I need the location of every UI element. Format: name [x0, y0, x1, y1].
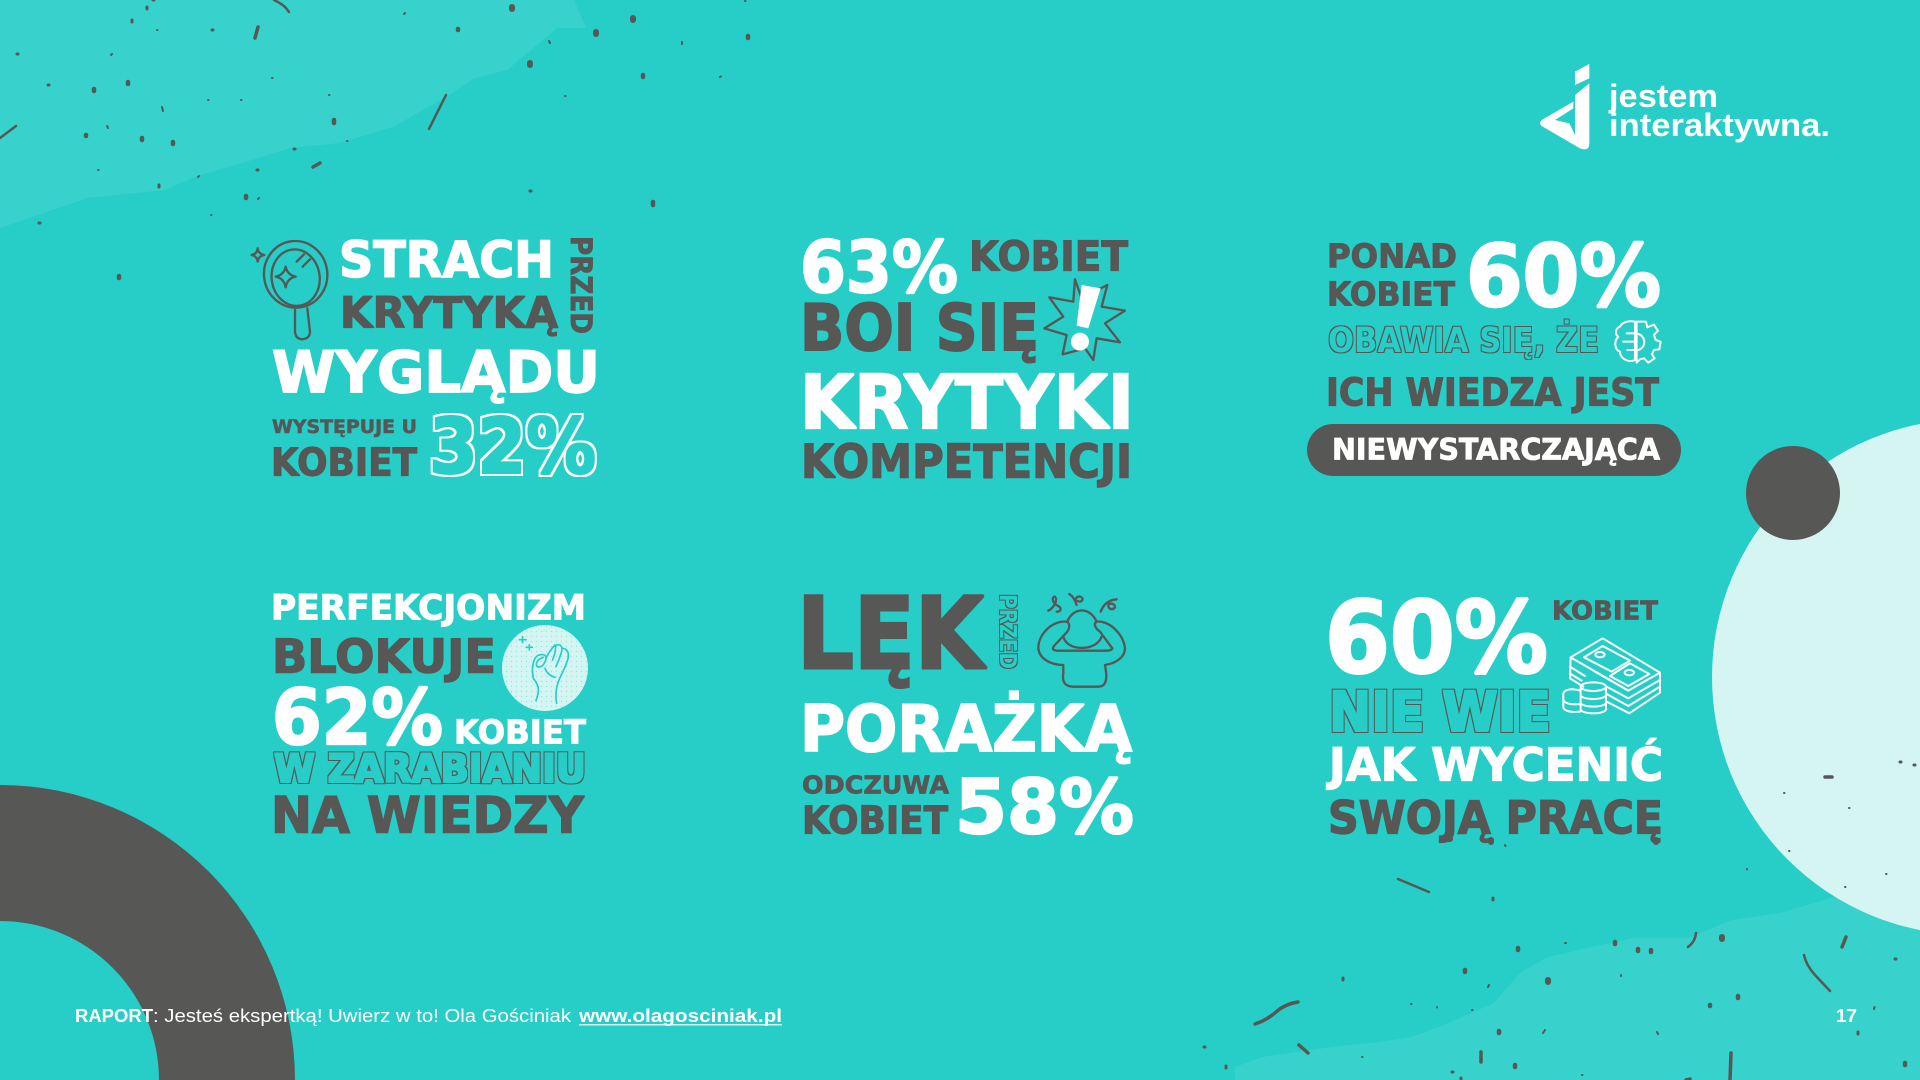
text: kobiet: KOBIET: [271, 440, 418, 486]
heading: porażką: PORAŻKĄ: [800, 691, 1132, 767]
heading: krytyką: KRYTYKĄ: [340, 288, 559, 338]
number: 60%: 60%: [1466, 227, 1661, 327]
icon: brain and gear: [1615, 321, 1661, 363]
rotated: przed: PRZED: [564, 236, 598, 334]
heading: blokuje: BLOKUJE: [272, 630, 496, 684]
logo icon: [1540, 64, 1589, 149]
panel: strach przed krytyką wyglądu: [252, 231, 600, 492]
text: kobiet: KOBIET: [802, 798, 949, 844]
logo: jestem interaktywna: [1540, 64, 1830, 149]
logo text: jestem: [1608, 78, 1718, 114]
logo text: [1608, 78, 1830, 143]
panel: lęk przed porażką 58%: [797, 577, 1134, 851]
pill: niewystarczająca: [1307, 424, 1681, 476]
icon: stressed person: [1038, 594, 1125, 687]
dark circle: [1746, 446, 1840, 540]
icon: hand mirror: [252, 237, 332, 339]
heading: krytyki: KRYTYKI: [800, 360, 1134, 446]
logo text: interaktywna.: [1609, 107, 1830, 143]
icon: perfect hand in circle: [502, 625, 588, 711]
footer: source line: www.olagosciniak.pl: [578, 1006, 782, 1026]
text: kobiet: KOBIET: [1552, 596, 1658, 626]
text: ich wiedza jest: ICH WIEDZA JEST: [1326, 370, 1659, 414]
number: 60%: 60%: [1325, 581, 1548, 696]
text: kobiet: KOBIET: [969, 232, 1128, 280]
heading: jak wycenić: JAK WYCENIĆ: [1326, 738, 1663, 792]
text: odczuwa: ODCZUWA: [802, 770, 950, 800]
icon: exclamation burst: [1044, 279, 1125, 360]
text: kobiet: KOBIET: [1327, 274, 1455, 314]
text: kobiet: KOBIET: [454, 712, 586, 752]
number: 62%: 62%: [272, 674, 443, 763]
rotated outline: przed: PRZED: [994, 594, 1020, 669]
icon: money and coins: [1563, 638, 1660, 713]
heading: perfekcjonizm: PERFEKCJONIZM: [271, 588, 586, 628]
number: 58%: 58%: [955, 763, 1134, 851]
number: 63%: 63%: [800, 226, 958, 309]
heading: swoją pracę: SWOJĄ PRACĘ: [1328, 792, 1663, 844]
panel: ponad 60% kobiet obawia się: [1307, 227, 1681, 476]
panel: perfekcjonizm blokuje 62%: [271, 588, 588, 844]
panel: 60% kobiet nie wie jak wycenić swoją pracę: [1325, 581, 1663, 844]
footer: source line: : Jesteś ekspertką! Uwierz w to! Ola Gościniak: [153, 1006, 572, 1026]
brush patch: bottom right: [1235, 880, 1920, 1080]
text: ponad: PONAD: [1327, 236, 1457, 276]
dark arc bottom left: [0, 785, 295, 1080]
brush patch: top left: [0, 0, 586, 228]
page number: 17: [1836, 1006, 1857, 1026]
outline text: nie wie: NIE WIE: [1329, 680, 1551, 744]
text: występuje u: WYSTĘPUJE U: [272, 416, 417, 438]
footer: source line: RAPORT: [75, 1006, 153, 1026]
heading: strach: STRACH: [339, 231, 554, 289]
heading: lęk: LĘK: [797, 577, 987, 692]
number: 32%: 32%: [429, 403, 596, 492]
heading: kompetencji: KOMPETENCJI: [801, 434, 1132, 488]
panel: 63% kobiet boi się krytyki kompetencji: [800, 226, 1134, 488]
heading: na wiedzy: NA WIEDZY: [271, 786, 585, 844]
light circle: [1712, 419, 1920, 935]
heading: wyglądu: WYGLĄDU: [272, 340, 600, 406]
outline text: w zarabianiu: W ZARABIANIU: [274, 747, 586, 792]
heading: boi się: BOI SIĘ: [800, 292, 1039, 366]
pill: niewystarczająca: NIEWYSTARCZAJĄCA: [1332, 432, 1661, 466]
footer: source line: [75, 1006, 782, 1026]
outline text: obawia się, że: OBAWIA SIĘ, ŻE: [1328, 318, 1599, 361]
